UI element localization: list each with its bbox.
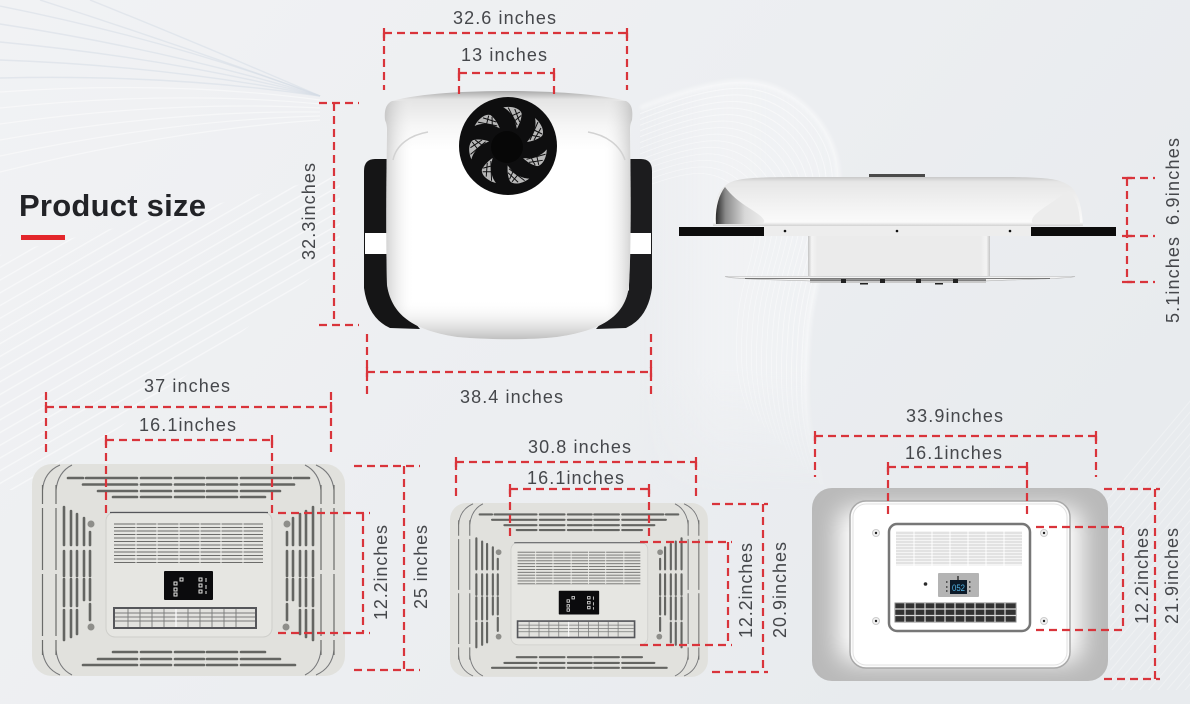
- dimension: 6.9 and 5.1 inches: [1122, 138, 1183, 323]
- bottom-left unit: [32, 464, 345, 676]
- bottom-right unit: [812, 488, 1108, 681]
- dimensions: right unit: 33.9inches: [906, 406, 1003, 426]
- lower box: [808, 236, 990, 276]
- top nub: [869, 174, 925, 177]
- dimension: 38.4 inches: [367, 334, 651, 407]
- dimensions: left unit: [46, 376, 431, 670]
- unit body: [386, 122, 631, 339]
- dimensions: left unit: 37 inches: [144, 376, 230, 396]
- lower grille: [895, 603, 1016, 622]
- dimensions: left unit: 25 inches: [411, 525, 431, 609]
- left black side wing: [364, 159, 420, 329]
- lower right lines: [1100, 395, 1190, 690]
- dimension: 32.3 inches: [299, 103, 359, 325]
- top cap: [385, 91, 632, 150]
- dimension: 6.9 and 5.1 inches: 6.9inches: [1163, 138, 1183, 225]
- mounting flange: [764, 226, 1031, 236]
- white side strips: [365, 233, 651, 254]
- dimension: 32.6 inches: 32.6 inches: [453, 8, 556, 28]
- bottom-middle unit: [450, 503, 708, 677]
- dimensions: middle unit: 20.9inches: [770, 542, 790, 638]
- dome: [713, 177, 1083, 226]
- bottom-right unit: 052: [952, 583, 965, 593]
- lower left diagonal lines: [0, 170, 340, 490]
- dimensions: right unit: 16.1inches: [905, 443, 1002, 463]
- top view unit: [364, 91, 652, 340]
- dimensions: right unit: [815, 406, 1182, 679]
- title: Product size: [19, 188, 206, 240]
- body side shading: [385, 101, 632, 337]
- dimension: 6.9 and 5.1 inches: 5.1inches: [1163, 237, 1183, 323]
- upper grille: [896, 531, 1022, 566]
- ceiling plate: [725, 276, 1075, 281]
- background: [0, 0, 838, 490]
- dimension: 13 inches: 13 inches: [461, 45, 547, 65]
- dimension: 32.6 inches: [384, 8, 627, 90]
- control panel: [889, 524, 1030, 631]
- dimensions: middle unit: 12.2inches: [736, 543, 756, 638]
- title accent bar: [21, 235, 65, 240]
- inner frame: [850, 501, 1070, 668]
- dimensions: left unit: 16.1inches: [139, 415, 236, 435]
- upper left line fan: [0, 0, 320, 96]
- right black side wing: [596, 159, 652, 329]
- dimensions: right unit: 21.9inches: [1162, 528, 1182, 624]
- screws: [872, 530, 880, 536]
- fan: [459, 97, 557, 195]
- display: [938, 573, 979, 597]
- dimension: 32.3 inches: 32.3inches: [299, 163, 319, 260]
- dimensions: right unit: 12.2inches: [1132, 528, 1152, 624]
- title: Product size: Product size: [19, 188, 206, 223]
- dimension: 38.4 inches: 38.4 inches: [460, 387, 563, 407]
- dimensions: middle unit: [456, 437, 790, 672]
- dimensions: left unit: 12.2inches: [371, 525, 391, 620]
- side view unit: [679, 174, 1116, 284]
- dimensions: middle unit: 16.1inches: [527, 468, 624, 488]
- dimensions: middle unit: 30.8 inches: [528, 437, 631, 457]
- dimension: 13 inches: [459, 45, 554, 99]
- right arc band: [641, 82, 838, 418]
